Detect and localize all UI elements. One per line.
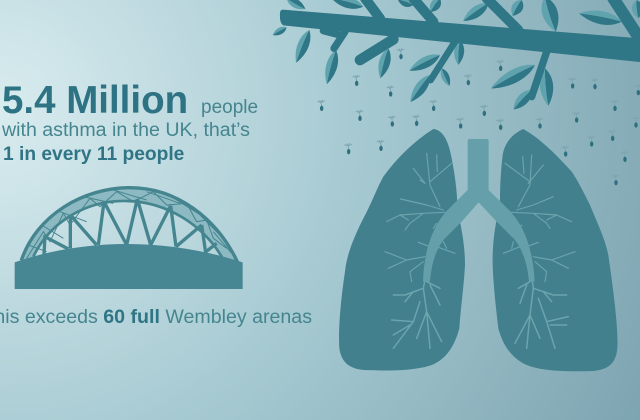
with asthma: with asthma in the UK, that’s (1, 119, 250, 141)
arch lattice band (21, 188, 237, 262)
5.4 Million: 5.4 Million (2, 79, 188, 122)
headline statistic (1, 79, 258, 165)
branch with leaves (271, 0, 640, 113)
pollen falling from branch (317, 48, 640, 185)
lungs (339, 129, 618, 371)
arch (21, 188, 237, 262)
left lung (339, 129, 465, 370)
stadium base (15, 244, 243, 289)
people: people (201, 97, 258, 118)
leaves (271, 0, 640, 113)
main limb (280, 10, 640, 62)
right lung (493, 129, 618, 371)
twigs (323, 0, 638, 97)
fine airways (385, 153, 575, 348)
trachea and bronchi (423, 139, 535, 282)
1 in every 11 people: 1 in every 11 people (3, 144, 185, 165)
icon: Wembley stadium (15, 188, 243, 289)
struts (44, 199, 217, 255)
